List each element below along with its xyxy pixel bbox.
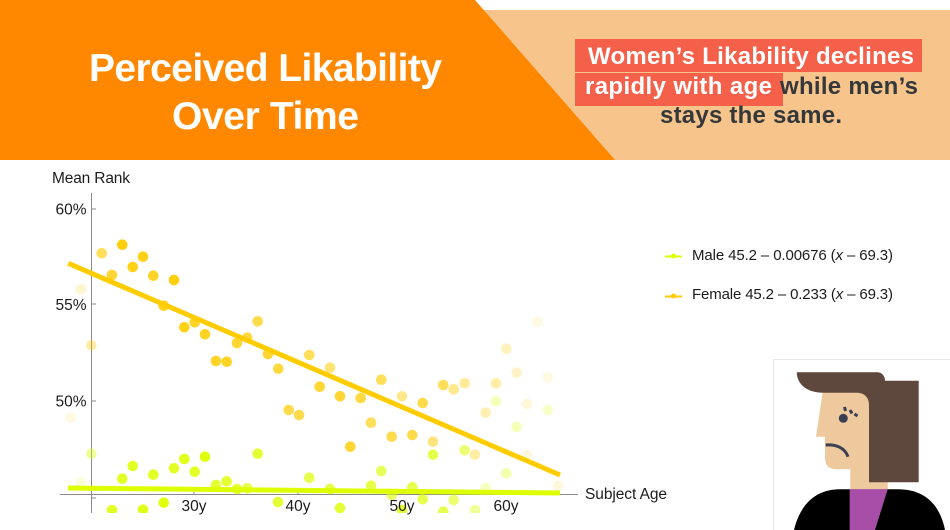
male data points [76,396,553,517]
x axis labels: 30y [182,498,207,515]
y axis labels: 60% [55,202,87,218]
title second line: Over Time [172,95,359,138]
male trend line [68,488,560,493]
highlight: second line [575,73,783,106]
female data points [65,239,563,491]
legend entry: male: Male 45.2 – 0.00676 (x – 69.3) [692,247,893,264]
legend entry: female: Female 45.2 – 0.233 (x – 69.3) [692,286,893,303]
x axis labels [182,498,519,515]
legend [665,247,893,303]
title: Perceived Likability [89,47,442,90]
icon: frowning woman portrait [774,360,950,530]
takeaway text: stays the same. [660,102,842,129]
x axis labels: 40y [286,498,311,515]
x axis labels: 50y [390,498,415,515]
axes [60,193,578,513]
y axis labels: 50% [55,394,87,410]
y axis title: Mean Rank [52,170,130,187]
highlight: first line [575,39,922,72]
y axis labels: 55% [55,297,87,314]
panel: takeaway background [470,10,950,160]
scatter chart [52,170,667,517]
panel: title background [0,0,615,160]
takeaway text [585,43,918,129]
x axis title: Subject Age [585,486,667,503]
x axis labels: 60y [494,498,519,515]
y axis labels [55,202,87,410]
takeaway text: Women’s Likability declines [588,43,914,70]
takeaway text: rapidly with age [585,73,772,100]
takeaway text: while men’s [779,73,918,100]
header banner [0,0,950,160]
female trend line [68,263,560,475]
